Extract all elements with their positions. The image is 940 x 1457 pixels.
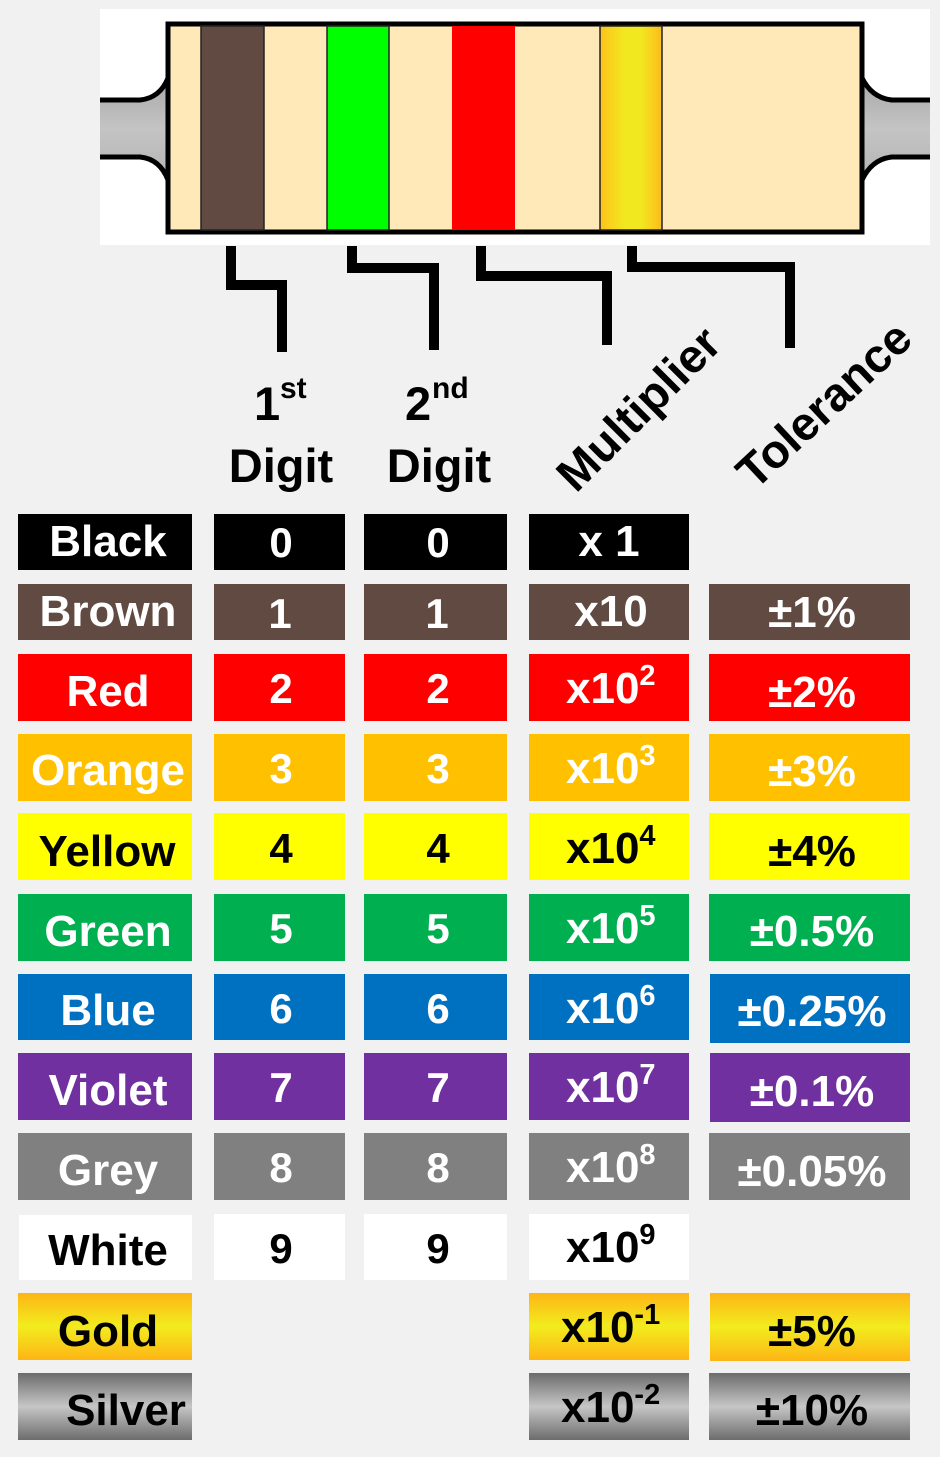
left lead	[100, 78, 168, 180]
row: grey: 8	[426, 1144, 450, 1191]
row: grey: Grey	[58, 1146, 159, 1195]
row: grey: 8	[269, 1144, 293, 1191]
row: black: 0	[269, 519, 293, 566]
row: green: 5	[639, 900, 656, 932]
row: red: 2	[269, 665, 293, 712]
row: brown: x10	[574, 587, 648, 636]
row: brown: 1	[425, 590, 449, 637]
row: brown: 1	[268, 590, 292, 637]
row: violet: Violet	[48, 1066, 168, 1115]
row: blue: Blue	[60, 986, 156, 1035]
row: violet: 7	[269, 1064, 293, 1111]
heading: 2nd digit: 2	[405, 377, 431, 430]
row: white: x10	[566, 1223, 639, 1272]
heading: 1st digit: st	[280, 372, 307, 405]
connector: first digit	[231, 246, 282, 352]
row: orange: x10	[566, 744, 639, 793]
row: grey: x10	[566, 1143, 639, 1192]
row: silver	[18, 1373, 910, 1440]
row: gold: Gold	[58, 1307, 158, 1356]
row: violet: 7	[426, 1064, 450, 1111]
band: brown	[201, 26, 264, 230]
row: brown	[18, 584, 910, 640]
row: orange: 3	[639, 740, 656, 772]
heading: 2nd digit	[387, 372, 492, 492]
row: black: x 1	[578, 517, 640, 566]
row: blue: x10	[566, 984, 639, 1033]
heading: 2nd digit: Digit	[387, 439, 492, 492]
row: black	[18, 514, 689, 570]
band: green	[327, 26, 389, 230]
connector: second digit	[352, 246, 434, 350]
band: gold	[600, 26, 662, 230]
row: brown: ±1%	[768, 588, 856, 637]
row: brown: Brown	[40, 587, 176, 636]
band: red	[452, 26, 515, 230]
row: silver: -2	[634, 1379, 660, 1411]
row: white: 9	[269, 1225, 293, 1272]
row: yellow	[18, 813, 910, 880]
row: orange	[18, 734, 910, 801]
row: gold: ±5%	[768, 1307, 856, 1356]
heading: 1st digit: Digit	[229, 439, 334, 492]
resistor body	[168, 24, 862, 232]
heading: multiplier: Multiplier	[546, 316, 731, 501]
row: silver: x10	[561, 1383, 634, 1432]
row: green: 5	[426, 905, 450, 952]
row: yellow: 4	[269, 825, 293, 872]
row: yellow: 4	[639, 820, 656, 852]
row: yellow: x10	[566, 824, 639, 873]
row: red	[18, 654, 910, 721]
row: gold	[18, 1293, 910, 1361]
row: red: 2	[639, 660, 656, 692]
row: white	[19, 1214, 689, 1280]
heading: 1st digit: 1	[254, 377, 280, 430]
row: green	[18, 894, 910, 961]
row: white: 9	[426, 1225, 450, 1272]
row: blue: 6	[426, 985, 450, 1032]
connector: tolerance	[632, 246, 790, 348]
row: green: 5	[269, 905, 293, 952]
row: grey: ±0.05%	[738, 1147, 886, 1196]
row: black: Black	[49, 517, 167, 566]
row: red: x10	[566, 664, 639, 713]
row: green: ±0.5%	[750, 907, 874, 956]
row: red: ±2%	[768, 668, 856, 717]
row: orange: 3	[426, 745, 450, 792]
row: violet: x10	[566, 1063, 639, 1112]
row: red: Red	[66, 667, 150, 716]
right lead	[862, 78, 930, 180]
row: yellow: Yellow	[39, 827, 176, 876]
row: black: 0	[426, 519, 450, 566]
row: grey	[18, 1133, 910, 1200]
row: violet: 7	[639, 1059, 656, 1091]
resistor diagram	[100, 9, 930, 245]
row: green: x10	[566, 904, 639, 953]
row: orange: 3	[269, 745, 293, 792]
heading: 2nd digit: nd	[432, 372, 469, 405]
connector: multiplier	[481, 246, 607, 345]
row: blue: ±0.25%	[738, 987, 886, 1036]
row: violet	[18, 1053, 910, 1122]
row: blue: 6	[269, 985, 293, 1032]
row: yellow: ±4%	[768, 827, 856, 876]
row: gold: x10	[561, 1303, 634, 1352]
row: grey: 8	[639, 1139, 656, 1171]
row: silver: Silver	[66, 1386, 186, 1435]
row: white: White	[48, 1226, 168, 1275]
heading: 1st digit	[229, 372, 334, 492]
row: white: 9	[639, 1219, 656, 1251]
row: green: Green	[44, 907, 172, 956]
row: red: 2	[426, 665, 450, 712]
heading: tolerance: Tolerance	[726, 311, 922, 498]
row: orange: ±3%	[768, 747, 856, 796]
row: orange: Orange	[31, 746, 185, 795]
row: blue	[18, 974, 910, 1043]
row: yellow: 4	[426, 825, 450, 872]
row: blue: 6	[639, 980, 656, 1012]
row: violet: ±0.1%	[750, 1067, 874, 1116]
row: gold: -1	[634, 1299, 660, 1331]
row: silver: ±10%	[756, 1386, 868, 1435]
